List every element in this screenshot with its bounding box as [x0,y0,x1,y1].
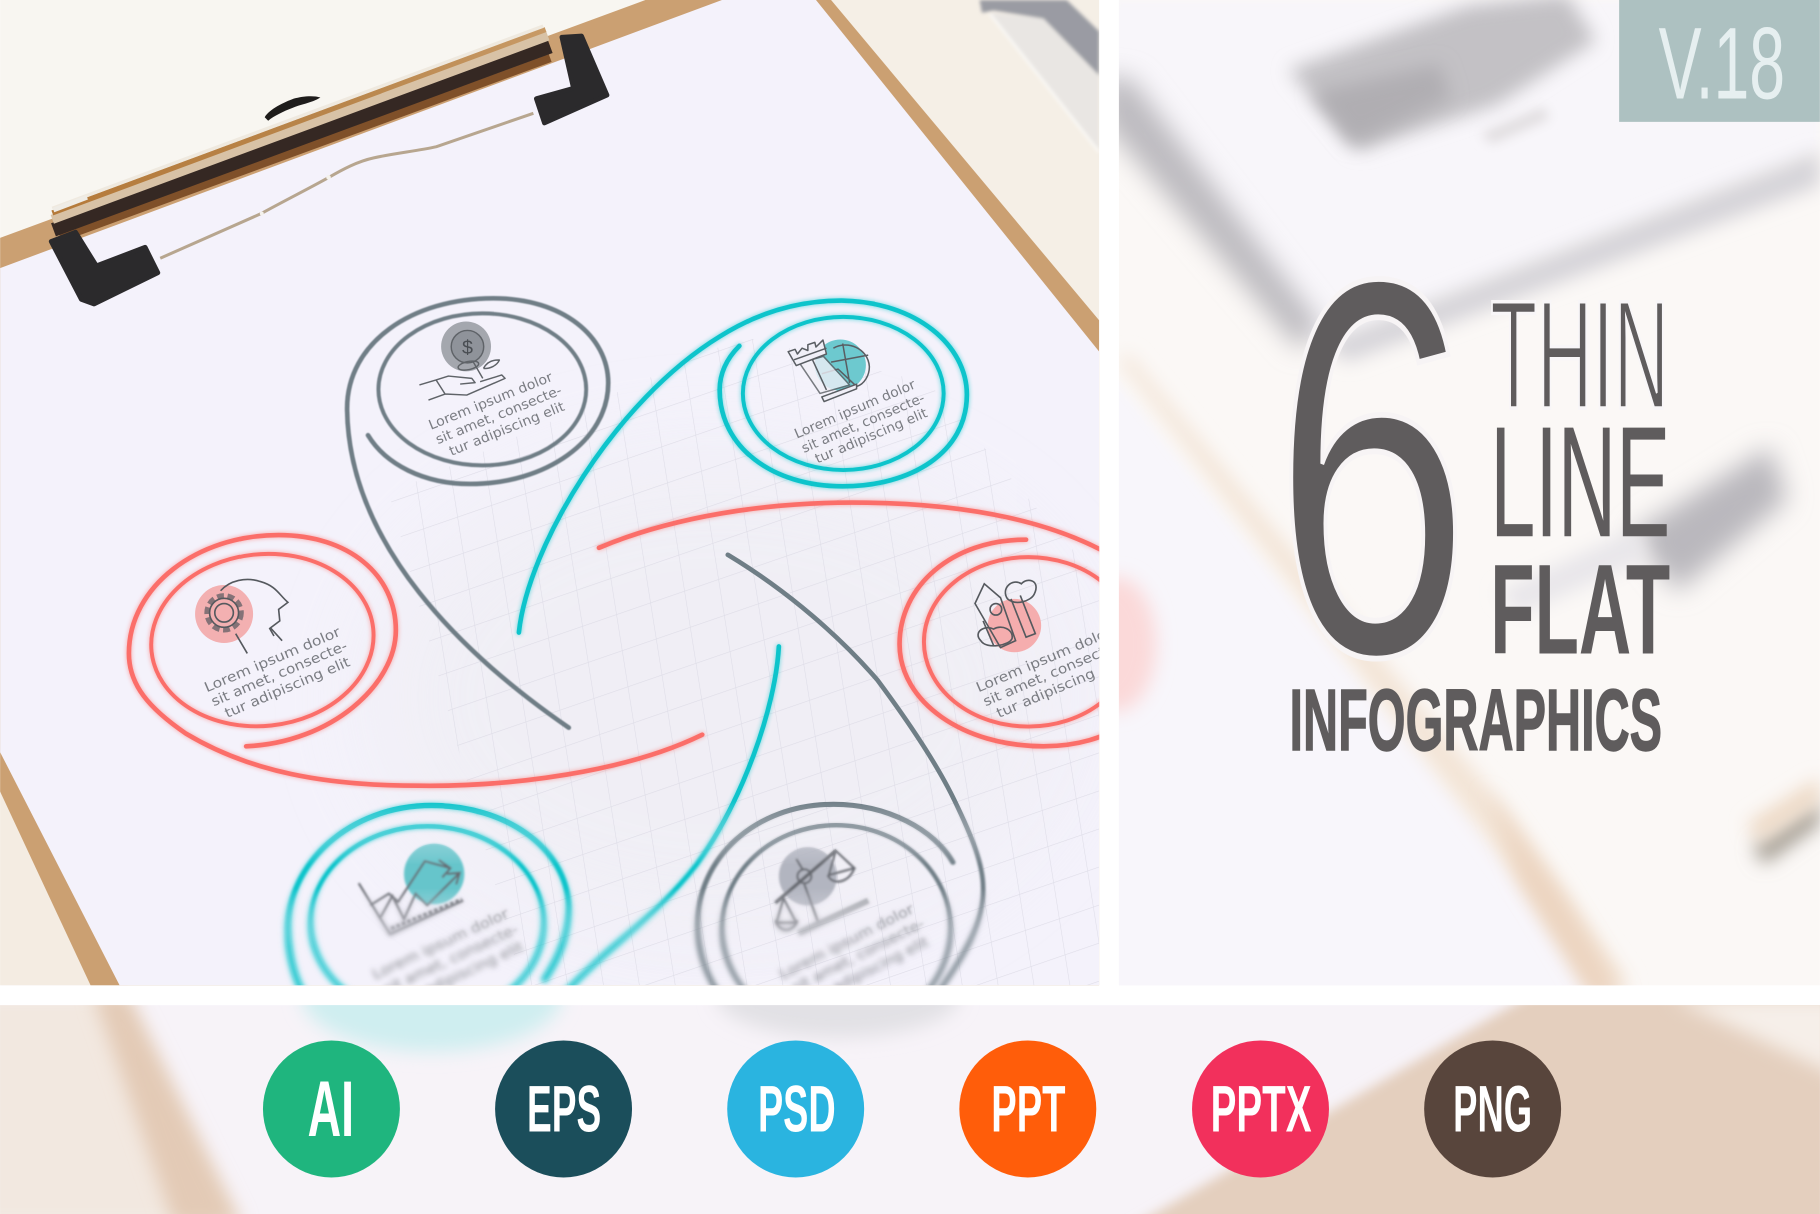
icon: head with gear [195,579,288,653]
text: red left caption: sit amet, consecte- [209,638,350,710]
spiral: red left [129,535,702,786]
badge: PNG: PNG [1453,1073,1532,1147]
text: grey top caption [427,370,567,460]
clip wire [160,113,533,258]
icon: tower and pie [788,339,869,402]
badge: PPTX: PPTX [1211,1073,1312,1147]
spiral: red right [599,503,1133,746]
text: red left caption: Lorem ipsum dolor [202,624,343,696]
text: grey bottom caption: tur adipiscing elit [806,934,932,1009]
text: teal top caption: sit amet, consecte- [800,391,927,457]
text: teal bottom caption [370,906,526,1010]
text: teal top caption: tur adipiscing elit [813,406,930,467]
text: grey top caption: tur adipiscing elit [447,400,567,460]
text: red left caption: tur adipiscing elit [222,654,353,722]
icon: growth chart [359,844,464,934]
clip: metal clip [51,26,607,304]
badge: EPS [495,1040,632,1177]
numeral 6: 6 [1273,168,1471,767]
panel: clipboard photo [0,0,1133,1032]
spiral: teal top [519,301,967,633]
panel: format strip [0,940,1820,1214]
text: red left caption [202,624,353,722]
spiral: grey top [347,298,608,728]
badge: PSD: PSD [758,1073,836,1147]
text: grey bottom caption: sit amet, consecte- [789,916,927,997]
paper shading [371,453,1068,940]
text: red right caption [974,624,1125,722]
grid lines [348,337,1099,985]
text: teal top caption [792,377,930,467]
word FLAT: FLAT [1490,538,1670,681]
badge: PPT: PPT [991,1073,1066,1147]
paper sheet [0,0,1099,985]
blurred shapes [1077,0,1820,998]
text: teal bottom caption: Lorem ipsum dolor [370,906,512,983]
icon: hand and coin plant [419,321,505,400]
badge: AI [263,1040,400,1177]
text: grey bottom caption [777,901,932,1009]
text: grey bottom caption: Lorem ipsum dolor [777,901,917,983]
text: red right caption: tur adipiscing elit [994,654,1125,722]
spiral: grey bottom [698,555,983,1032]
text: teal top caption: Lorem ipsum dolor [792,377,918,442]
clipboard board [0,0,1099,985]
text: red right caption: sit amet, consecte- [981,638,1122,710]
badge: AI: AI [308,1065,354,1153]
icon: hand and coin plant: $ [462,337,473,359]
spiral: teal bottom [288,646,779,1019]
text: red right caption: Lorem ipsum dolor [974,624,1115,696]
clip tab [265,96,320,121]
badge: PNG [1424,1040,1561,1177]
text: grey top caption: sit amet, consecte- [434,384,564,448]
title [1273,168,1670,769]
panel: blurred photo with title [1077,0,1820,998]
text: teal bottom caption: sit amet, consecte- [381,922,521,998]
badge: PPTX [1192,1040,1329,1177]
clear plastic item [980,0,1099,152]
text: grey top caption: Lorem ipsum dolor [427,370,555,434]
badge: PPT [959,1040,1096,1177]
badge: PSD [727,1040,864,1177]
icon: balance scale [775,847,868,933]
blurred strip shapes [0,940,1820,1214]
icon: rocket and clouds [975,580,1041,652]
clip right corner [536,36,607,123]
badge: EPS: EPS [527,1073,601,1147]
blurred paper [1108,0,1820,346]
clip left corner [51,232,158,304]
text: teal bottom caption: tur adipiscing elit [397,939,526,1010]
clip bar [52,26,550,238]
infographic artwork [124,294,1100,859]
